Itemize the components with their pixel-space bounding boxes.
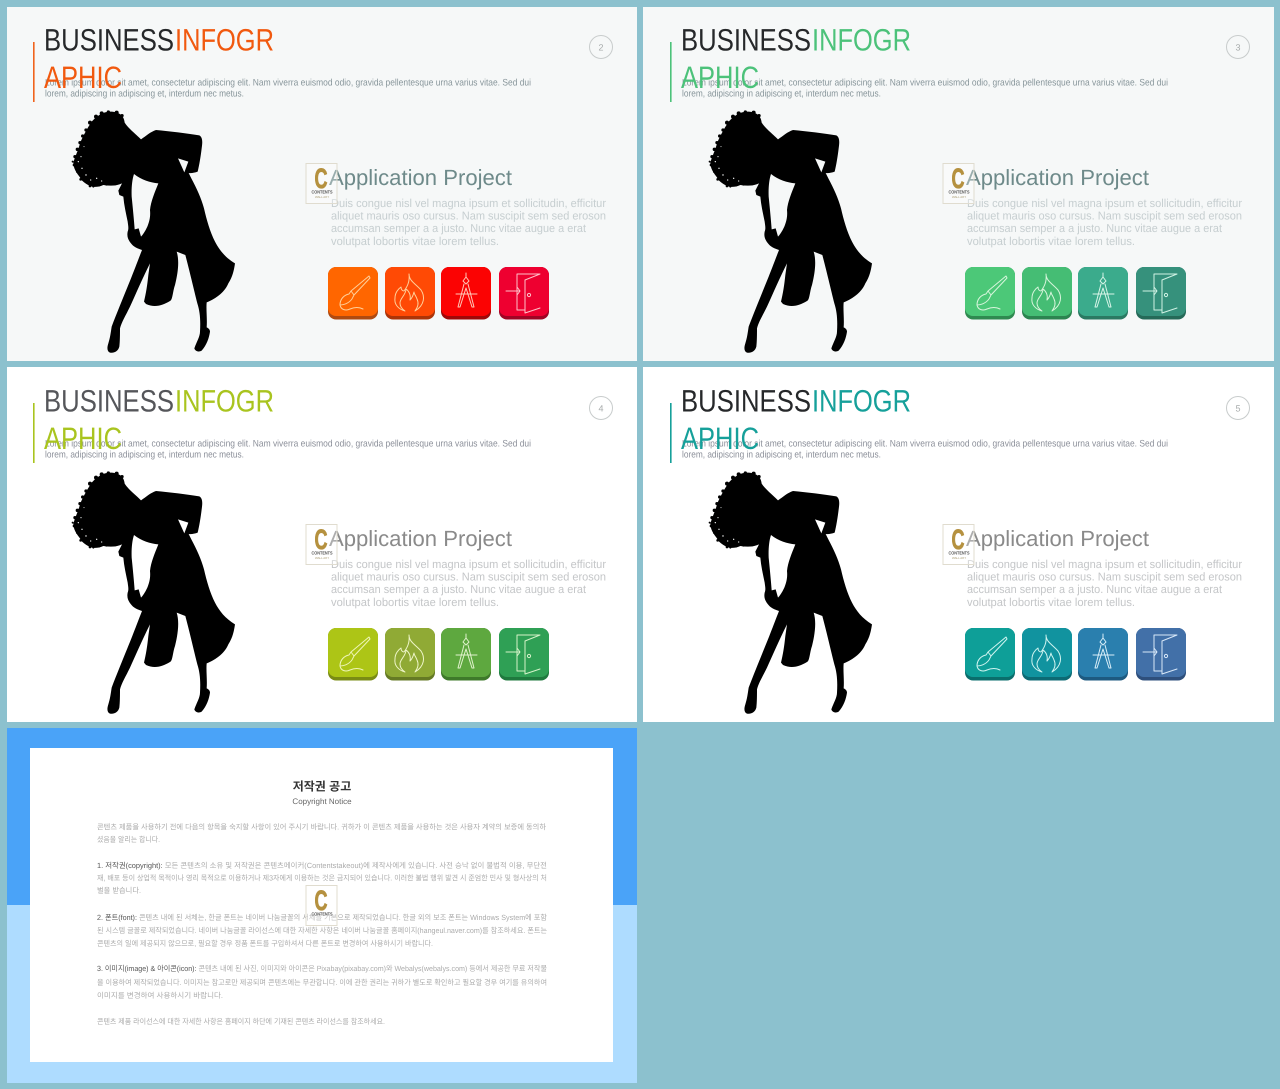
body text: aliquet mauris oso cursus. Nam suscipit sem sed eroson [967,572,1242,584]
icon: compass [1078,267,1128,320]
heading: Application Project [966,165,1149,190]
icon: door [499,267,549,320]
watermark logo: CONTENTS [312,190,332,194]
watermark logo [306,163,337,204]
body text: accumsan semper a a justo. Nunc vitae augue a erat [331,223,587,235]
notice card [30,748,613,1062]
icon: flame [1022,628,1072,680]
icon: brush [328,628,378,680]
paragraph: intro: Lorem ipsum dolor sit amet, consectetur adipiscing elit. Nam viverra euismod odio, gravida pellentesque urna varius vitae. Sed dui [682,78,1168,88]
notice body: 벌을 받습니다. [97,886,141,895]
body text: Duis congue nisl vel magna ipsum et sollicitudin, efficitur [967,198,1242,210]
body text [331,559,606,609]
body text [331,198,606,248]
notice body: 이미지를 변경하여 사용하시기 바랍니다. [97,991,223,1000]
title: APHIC [681,60,759,95]
page number: 4 [598,404,604,414]
body text: accumsan semper a a justo. Nunc vitae augue a erat [331,584,587,596]
silhouette [709,110,872,353]
watermark logo: WALL ART [952,556,966,560]
paragraph: intro: Lorem ipsum dolor sit amet, consectetur adipiscing elit. Nam viverra euismod odio, gravida pellentesque urna varius vitae. Sed dui [682,438,1168,450]
body text: accumsan semper a a justo. Nunc vitae augue a erat [967,584,1223,596]
watermark logo: C [314,163,328,194]
icon: brush [965,628,1015,680]
panel: slide 5 teal [643,367,1274,722]
page number [590,36,612,58]
icon: compass [441,267,491,320]
paragraph: intro [45,78,531,100]
icon: flame [385,628,435,680]
title: APHIC [681,421,759,456]
watermark logo [943,163,974,204]
accent bar [33,42,35,102]
panel: slide 3 green [643,7,1274,361]
notice body [97,822,547,1026]
title: INFOGR [175,384,274,418]
page number: 3 [1235,42,1241,52]
notice body: 재, 배포 등이 상업적 목적이나 영리 목적으로 이용하거나 제3자에게 이용하는 것은 금지되어 있습니다. 이러한 불법 행위 발견 시 준엄한 민사 및 형사상의 처 [97,874,547,882]
body text: aliquet mauris oso cursus. Nam suscipit sem sed eroson [331,572,606,584]
title [681,22,911,95]
title: BUSINESS [681,22,811,58]
accent bar [670,42,672,102]
heading: Application Project [329,165,512,190]
icon: door [499,628,549,680]
watermark logo: C [952,524,964,555]
heading: Application Project [966,526,1149,551]
watermark logo: C [314,524,328,555]
paragraph: intro: Lorem ipsum dolor sit amet, consectetur adipiscing elit. Nam viverra euismod odio, gravida pellentesque urna varius vitae. Sed dui [45,438,531,450]
watermark logo: CONTENTS [948,550,970,556]
paragraph: intro: lorem, adipiscing in adipiscing et, interdum nec metus. [45,450,244,460]
title: INFOGR [812,22,911,58]
icon: flame [1022,267,1072,320]
icon: compass [1078,628,1128,680]
title: INFOGR [175,22,274,58]
icon: door [1136,628,1186,680]
icon tiles [965,267,1186,320]
watermark logo: C [952,163,964,194]
icon tiles [328,628,549,680]
accent bar [33,403,35,463]
watermark logo [306,885,337,926]
page number [1226,36,1250,58]
body text: accumsan semper a a justo. Nunc vitae augue a erat [967,223,1223,235]
title: BUSINESS [681,384,811,418]
body text [967,559,1242,609]
silhouette [709,471,872,714]
body text: aliquet mauris oso cursus. Nam suscipit sem sed eroson [331,210,606,222]
panel: slide 2 orange [7,7,637,361]
icon: brush [328,267,378,320]
paragraph: intro [682,78,1168,100]
notice body: 된 시스템 글꼴로 제작되었습니다. 네이버 나눔글꼴 라이선스에 대한 자세한 사항은 네이버 나눔글꼴 홈페이지(hangeul.naver.com)를 참조하세요. 폰트는 [97,926,547,935]
icon tiles [965,628,1186,680]
accent bar [670,403,672,463]
watermark logo: WALL ART [952,195,966,199]
body text: volutpat lobortis vitae lorem tellus. [967,597,1135,609]
paragraph: intro: lorem, adipiscing in adipiscing et, interdum nec metus. [45,88,244,100]
title [44,22,274,95]
body text: volutpat lobortis vitae lorem tellus. [331,597,499,609]
watermark logo: WALL ART [315,556,329,560]
title [44,384,274,456]
paragraph: intro: lorem, adipiscing in adipiscing et, interdum nec metus. [682,450,881,460]
page number [1226,396,1250,420]
body text: volutpat lobortis vitae lorem tellus. [331,236,499,248]
title: BUSINESS [44,22,174,58]
watermark logo [943,524,974,564]
silhouette [72,471,235,714]
notice body: 콘텐츠 제품을 사용하기 전에 다음의 항목을 숙지할 사항이 있어 주시기 바랍니다. 귀하가 이 콘텐츠 제품을 사용하는 것은 사용자 계약의 보증에 동의하 [97,822,546,832]
body text: Duis congue nisl vel magna ipsum et sollicitudin, efficitur [331,198,606,210]
paragraph: intro: Lorem ipsum dolor sit amet, consectetur adipiscing elit. Nam viverra euismod odio, gravida pellentesque urna varius vitae. Sed dui [45,78,531,88]
panel: slide 4 lime [7,367,637,722]
watermark logo: CONTENTS [312,912,332,916]
page number [590,396,612,420]
icon: flame [385,267,435,320]
title [681,384,911,456]
notice subtitle: Copyright Notice [292,797,352,806]
icon: compass [441,628,491,680]
body text: Duis congue nisl vel magna ipsum et sollicitudin, efficitur [967,559,1242,571]
title: APHIC [44,60,122,95]
watermark logo: CONTENTS [312,550,332,556]
notice body: 2. 폰트(font): 콘텐츠 내에 된 서체는, 한글 폰트는 네이버 나눔글꼴의 서체를 기본으로 제작되었습니다. 한글 외의 보조 폰트는 Windows System에 포함 [97,913,547,922]
notice body: 을 이용하여 제작되었습니다. 이미지는 참고로만 제공되며 콘텐츠에는 무관합니다. 이에 관한 권리는 귀하가 별도로 확인하고 필요할 경우 여기를 유의하여 [97,978,547,987]
paragraph: intro [682,438,1168,460]
panel: copyright notice [7,728,637,1083]
body text: aliquet mauris oso cursus. Nam suscipit sem sed eroson [967,210,1242,222]
page number: 2 [598,42,604,52]
body text: volutpat lobortis vitae lorem tellus. [967,236,1135,248]
icon tiles [328,267,549,320]
watermark logo: C [314,885,328,916]
notice body: 3. 이미지(image) & 아이콘(icon): 콘텐츠 내에 된 사진, 이미지와 아이콘은 Pixabay(pixabay.com)와 Webalys(webalys.com) 등에서 제공한 무료 저작물 [97,964,547,973]
title: INFOGR [812,384,911,418]
notice body: 콘텐츠의 일에 제공되지 않으므로, 필요할 경우 정품 폰트를 구입하셔서 다른 폰트로 변경하여 사용하시기 바랍니다. [97,939,433,948]
notice title: 저작권 공고 [293,780,351,794]
notice body: 1. 저작권(copyright): 모든 콘텐츠의 소유 및 저작권은 콘텐츠메이커(Contentstakeout)에 제작사에게 있습니다. 사전 승낙 없이 불법적 이용, 무단전 [97,861,547,870]
watermark logo [306,524,337,564]
title: BUSINESS [44,384,174,418]
watermark logo: WALL ART [315,195,329,199]
silhouette [72,110,235,353]
icon: door [1136,267,1186,320]
body text [967,198,1242,248]
notice body: 셨음을 알리는 합니다. [97,835,160,844]
page number: 5 [1235,404,1241,414]
paragraph: intro [45,438,531,460]
heading: Application Project [329,526,512,551]
title: APHIC [44,421,122,456]
paragraph: intro: lorem, adipiscing in adipiscing et, interdum nec metus. [682,88,881,100]
watermark logo: CONTENTS [948,190,970,194]
body text: Duis congue nisl vel magna ipsum et sollicitudin, efficitur [331,559,606,571]
icon: brush [965,267,1015,320]
notice body: 콘텐츠 제품 라이선스에 대한 자세한 사항은 홈페이지 하단에 기재된 콘텐츠 라이선스를 참조하세요. [97,1017,385,1026]
